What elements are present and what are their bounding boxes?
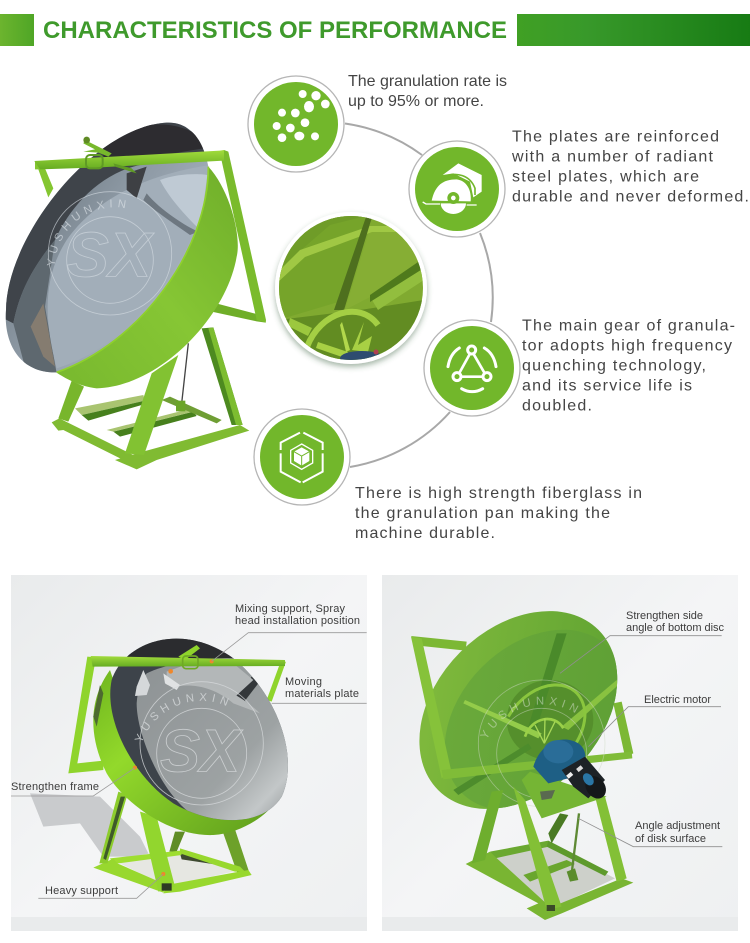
panel: rear labelled view	[382, 575, 738, 931]
label: strengthen frame: Strengthen frame	[11, 781, 99, 793]
feature 4: fiberglass	[254, 409, 642, 542]
text: radiant steel plates: with a number of radiant	[511, 148, 714, 166]
watermark	[478, 680, 606, 807]
machine photo: rear labelled	[411, 611, 722, 920]
title: CHARACTERISTICS OF PERFORMANCE	[43, 17, 507, 44]
icon: triangle network	[424, 320, 520, 416]
text: fiberglass: machine durable.	[355, 525, 495, 542]
header right gradient block	[517, 14, 750, 46]
panel: front labelled view	[11, 575, 367, 931]
connecting arc	[345, 124, 493, 467]
text: granulation rate: The granulation rate is	[348, 73, 507, 90]
label: electric motor: Electric motor	[644, 694, 711, 706]
label: moving materials plate: Moving	[285, 676, 322, 688]
text: radiant steel plates: The plates are reinforced	[512, 128, 719, 146]
icon: circular saw	[409, 141, 505, 237]
watermark	[46, 191, 172, 316]
label: mixing support: head installation position	[235, 615, 360, 627]
feature 2: radiant steel plates	[409, 128, 749, 237]
text: main gear: tor adopts high frequency	[522, 338, 732, 354]
detail circle: underside of pan	[275, 212, 427, 365]
watermark: YUSHUNXIN	[46, 200, 126, 266]
label: angle adjustment: of disk surface	[635, 833, 706, 845]
text: main gear: The main gear of granula-	[522, 318, 735, 334]
text: radiant steel plates: durable and never deformed.	[512, 188, 749, 206]
machine photo: front view of granulator pan	[6, 122, 266, 470]
icon: granules	[248, 76, 344, 172]
text: fiberglass: There is high strength fiberglass in	[355, 485, 642, 502]
header left block	[0, 14, 34, 46]
text: granulation rate: up to 95% or more.	[348, 93, 484, 110]
base rails	[493, 843, 615, 910]
text: radiant steel plates: steel plates, which are	[512, 168, 699, 186]
machine photo: front labelled	[11, 632, 367, 899]
watermark	[134, 681, 264, 806]
watermark: YUSHUNXIN	[480, 696, 578, 737]
watermark: SX	[67, 221, 155, 291]
label: angle adjustment: Angle adjustment	[635, 820, 720, 832]
base rails	[113, 852, 240, 887]
text: fiberglass: the granulation pan making the	[355, 505, 610, 522]
label: heavy support: Heavy support	[45, 885, 118, 897]
watermark: SX	[160, 718, 243, 785]
icon: cube in hexagon	[254, 409, 350, 505]
base rails	[75, 395, 145, 415]
text: main gear: quenching technology,	[522, 358, 706, 374]
watermark: YUSHUNXIN	[134, 692, 229, 740]
feature 3: main gear	[424, 318, 735, 416]
text: main gear: doubled.	[522, 398, 592, 414]
feature 1: granulation rate	[248, 73, 507, 172]
label: mixing support: Mixing support, Spray	[235, 603, 346, 615]
text: main gear: and its service life is	[522, 378, 692, 394]
label: strengthen side angle: angle of bottom disc	[626, 622, 724, 634]
label: strengthen side angle: Strengthen side	[626, 610, 703, 622]
label: moving materials plate: materials plate	[285, 688, 359, 700]
header band	[0, 14, 750, 46]
